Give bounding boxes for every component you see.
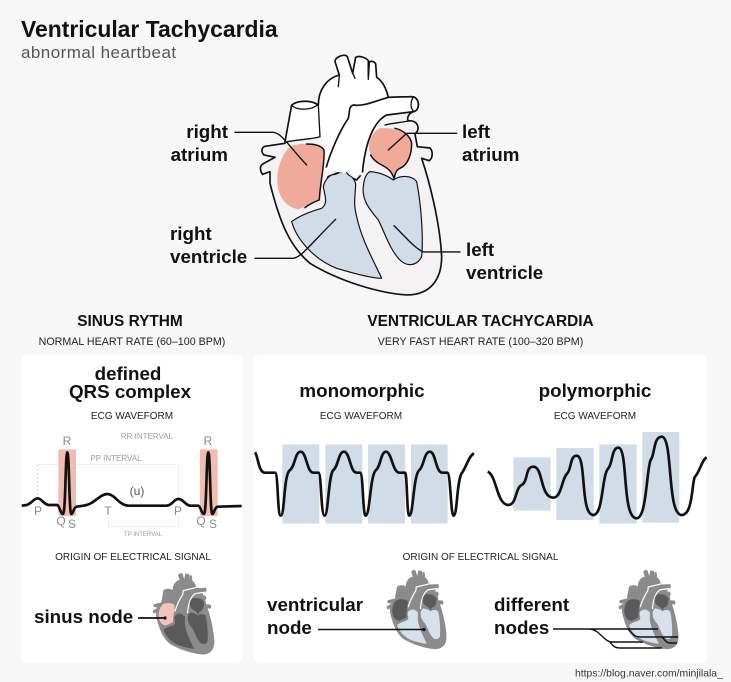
source credit: https://blog.naver.com/minjilala_	[575, 668, 723, 680]
heading: ventricular tachycardia	[367, 313, 594, 348]
heading: ventricular tachycardia: VERY FAST HEART RATE (100–320 BPM)	[378, 336, 583, 348]
label: left ventricle: left	[466, 239, 495, 260]
label: left atrium	[462, 121, 519, 165]
chart: sinus ECG waveform: S	[209, 517, 217, 531]
chart: sinus ECG waveform	[22, 432, 242, 538]
subheading: defined QRS complex: ECG WAVEFORM	[91, 411, 173, 422]
subheading: defined QRS complex: defined	[95, 363, 161, 384]
label: left atrium: left	[462, 121, 491, 142]
heading: sinus rhythm: SINUS RYTHM	[77, 313, 183, 330]
chart: sinus ECG waveform: R	[63, 434, 72, 448]
icon: small heart, different nodes	[619, 570, 679, 649]
chart: sinus ECG waveform: TP INTERVAL	[124, 532, 163, 538]
subheading: monomorphic: monomorphic	[299, 380, 425, 401]
chart: polymorphic ECG waveform	[488, 432, 707, 524]
subheading: polymorphic: ECG WAVEFORM	[554, 411, 636, 422]
caption: origin of electrical signal, tachycardia: ORIGIN OF ELECTRICAL SIGNAL	[403, 552, 559, 563]
label: right atrium	[171, 121, 229, 165]
heading: sinus rhythm	[39, 313, 225, 348]
caption: origin of electrical signal, sinus: ORIGIN OF ELECTRICAL SIGNAL	[55, 552, 211, 563]
label: right atrium: atrium	[171, 144, 228, 165]
label: right atrium: right	[186, 121, 229, 142]
title: abnormal heartbeat	[21, 43, 177, 62]
chart: sinus ECG waveform: P	[174, 504, 182, 518]
icon: small heart, sinus node highlighted	[153, 573, 214, 654]
panel: sinus rhythm	[21, 355, 242, 663]
chart: sinus ECG waveform: T	[104, 504, 112, 518]
label: left ventricle: ventricle	[466, 262, 543, 283]
label: right ventricle: right	[170, 223, 212, 244]
subheading: polymorphic: polymorphic	[539, 380, 651, 401]
label: different nodes	[494, 594, 678, 648]
large heart diagram	[235, 55, 460, 295]
chart: sinus ECG waveform: (u)	[130, 484, 144, 498]
subheading: polymorphic	[539, 380, 651, 422]
label: different nodes: different	[494, 594, 570, 615]
label: right ventricle: ventricle	[170, 246, 247, 267]
chart: sinus ECG waveform: PP INTERVAL	[90, 454, 142, 463]
chart: sinus ECG waveform: Q	[56, 514, 66, 528]
label: ventricular node: node	[267, 617, 312, 638]
panel: ventricular tachycardia	[254, 355, 707, 663]
heading: ventricular tachycardia: VENTRICULAR TACHYCARDIA	[367, 313, 594, 330]
label: right ventricle	[170, 223, 247, 267]
chart: sinus ECG waveform: Q	[196, 514, 206, 528]
heading: sinus rhythm: NORMAL HEART RATE (60–100 BPM)	[39, 336, 225, 348]
label: left ventricle	[466, 239, 543, 283]
label: ventricular node	[267, 594, 426, 638]
label: left atrium: atrium	[462, 144, 519, 165]
title: Ventricular Tachycardia	[21, 16, 278, 42]
label: different nodes: nodes	[494, 617, 549, 638]
subheading: defined QRS complex	[69, 363, 192, 422]
icon: small heart, ventricular node	[387, 570, 447, 649]
subheading: monomorphic	[299, 380, 425, 422]
subheading: defined QRS complex: QRS complex	[69, 381, 192, 402]
subheading: monomorphic: ECG WAVEFORM	[320, 411, 402, 422]
chart: sinus ECG waveform: R	[204, 434, 213, 448]
title	[21, 16, 278, 62]
chart: sinus ECG waveform: P	[34, 504, 42, 518]
chart: sinus ECG waveform: S	[68, 517, 76, 531]
chart: sinus ECG waveform: RR INTERVAL	[121, 432, 174, 441]
chart: monomorphic ECG waveform	[255, 444, 474, 524]
label: sinus node: sinus node	[34, 606, 133, 627]
label: ventricular node: ventricular	[267, 594, 364, 615]
